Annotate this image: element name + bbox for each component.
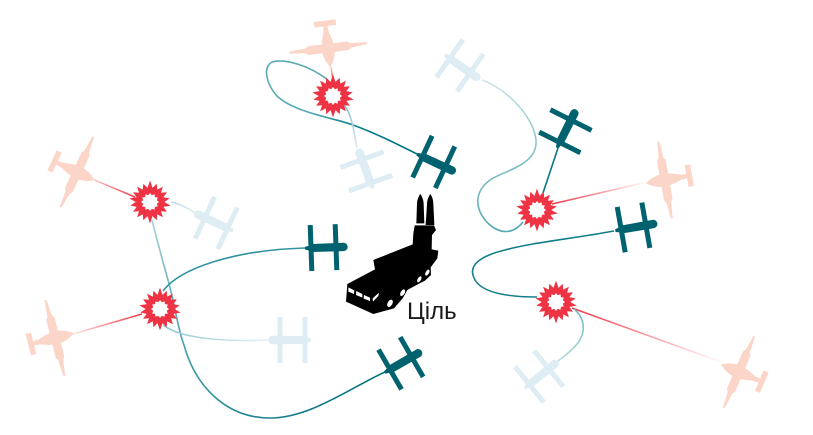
icon: teal drones (surviving positions) xyxy=(304,99,661,392)
red trajectories from interceptors to explosions xyxy=(73,67,724,363)
icon: red explosions xyxy=(129,74,577,330)
icon: pale blue drones (starting positions) xyxy=(185,36,572,406)
teal drone flight paths xyxy=(152,61,614,418)
icon: missile launcher truck target xyxy=(346,194,438,314)
label: target: Ціль xyxy=(407,298,457,325)
